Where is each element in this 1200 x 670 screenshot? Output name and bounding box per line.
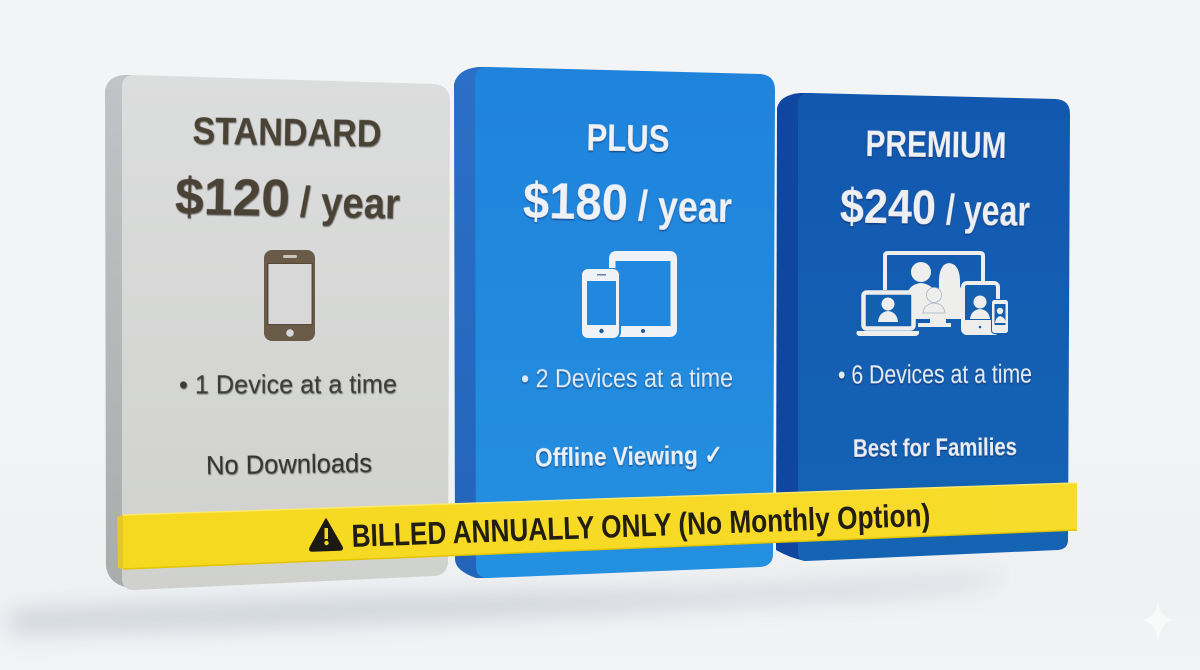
- feature: 6 devices: • 6 Devices at a time: [838, 360, 1032, 390]
- feature: 2 devices: • 2 Devices at a time: [521, 365, 733, 393]
- icon: warning triangle: [310, 519, 342, 551]
- icon: phone: [264, 250, 315, 341]
- price: standard: / year: [299, 178, 401, 228]
- icon: family devices: [856, 253, 1008, 336]
- price: premium: [840, 180, 1031, 237]
- panel: standard plan: [105, 75, 450, 590]
- price: premium: $240: [840, 180, 936, 235]
- banner: billed annually: [117, 483, 1077, 569]
- panel: plus plan: [454, 67, 775, 578]
- heading: plus: PLUS: [586, 117, 670, 161]
- icon: phone and tablet: [580, 251, 677, 339]
- price: standard: $120: [174, 168, 291, 228]
- price: plus: $180: [522, 172, 629, 231]
- price: premium: / year: [946, 186, 1031, 236]
- floor shadow: [10, 576, 1000, 634]
- icon: sparkle watermark: [1141, 603, 1175, 642]
- heading: standard: STANDARD: [192, 111, 382, 155]
- price: plus: / year: [637, 182, 733, 232]
- banner text: BILLED ANNUALLY ONLY (No Monthly Option): [351, 497, 931, 554]
- heading: premium: PREMIUM: [865, 123, 1007, 166]
- price: standard: [174, 168, 401, 230]
- feature: best for families: Best for Families: [853, 433, 1017, 463]
- price: plus: [522, 172, 733, 233]
- panel: premium plan: [776, 93, 1070, 561]
- feature: no downloads: No Downloads: [206, 450, 372, 480]
- feature: 1 device: • 1 Device at a time: [179, 369, 397, 399]
- feature: offline viewing: Offline Viewing ✓: [535, 440, 723, 472]
